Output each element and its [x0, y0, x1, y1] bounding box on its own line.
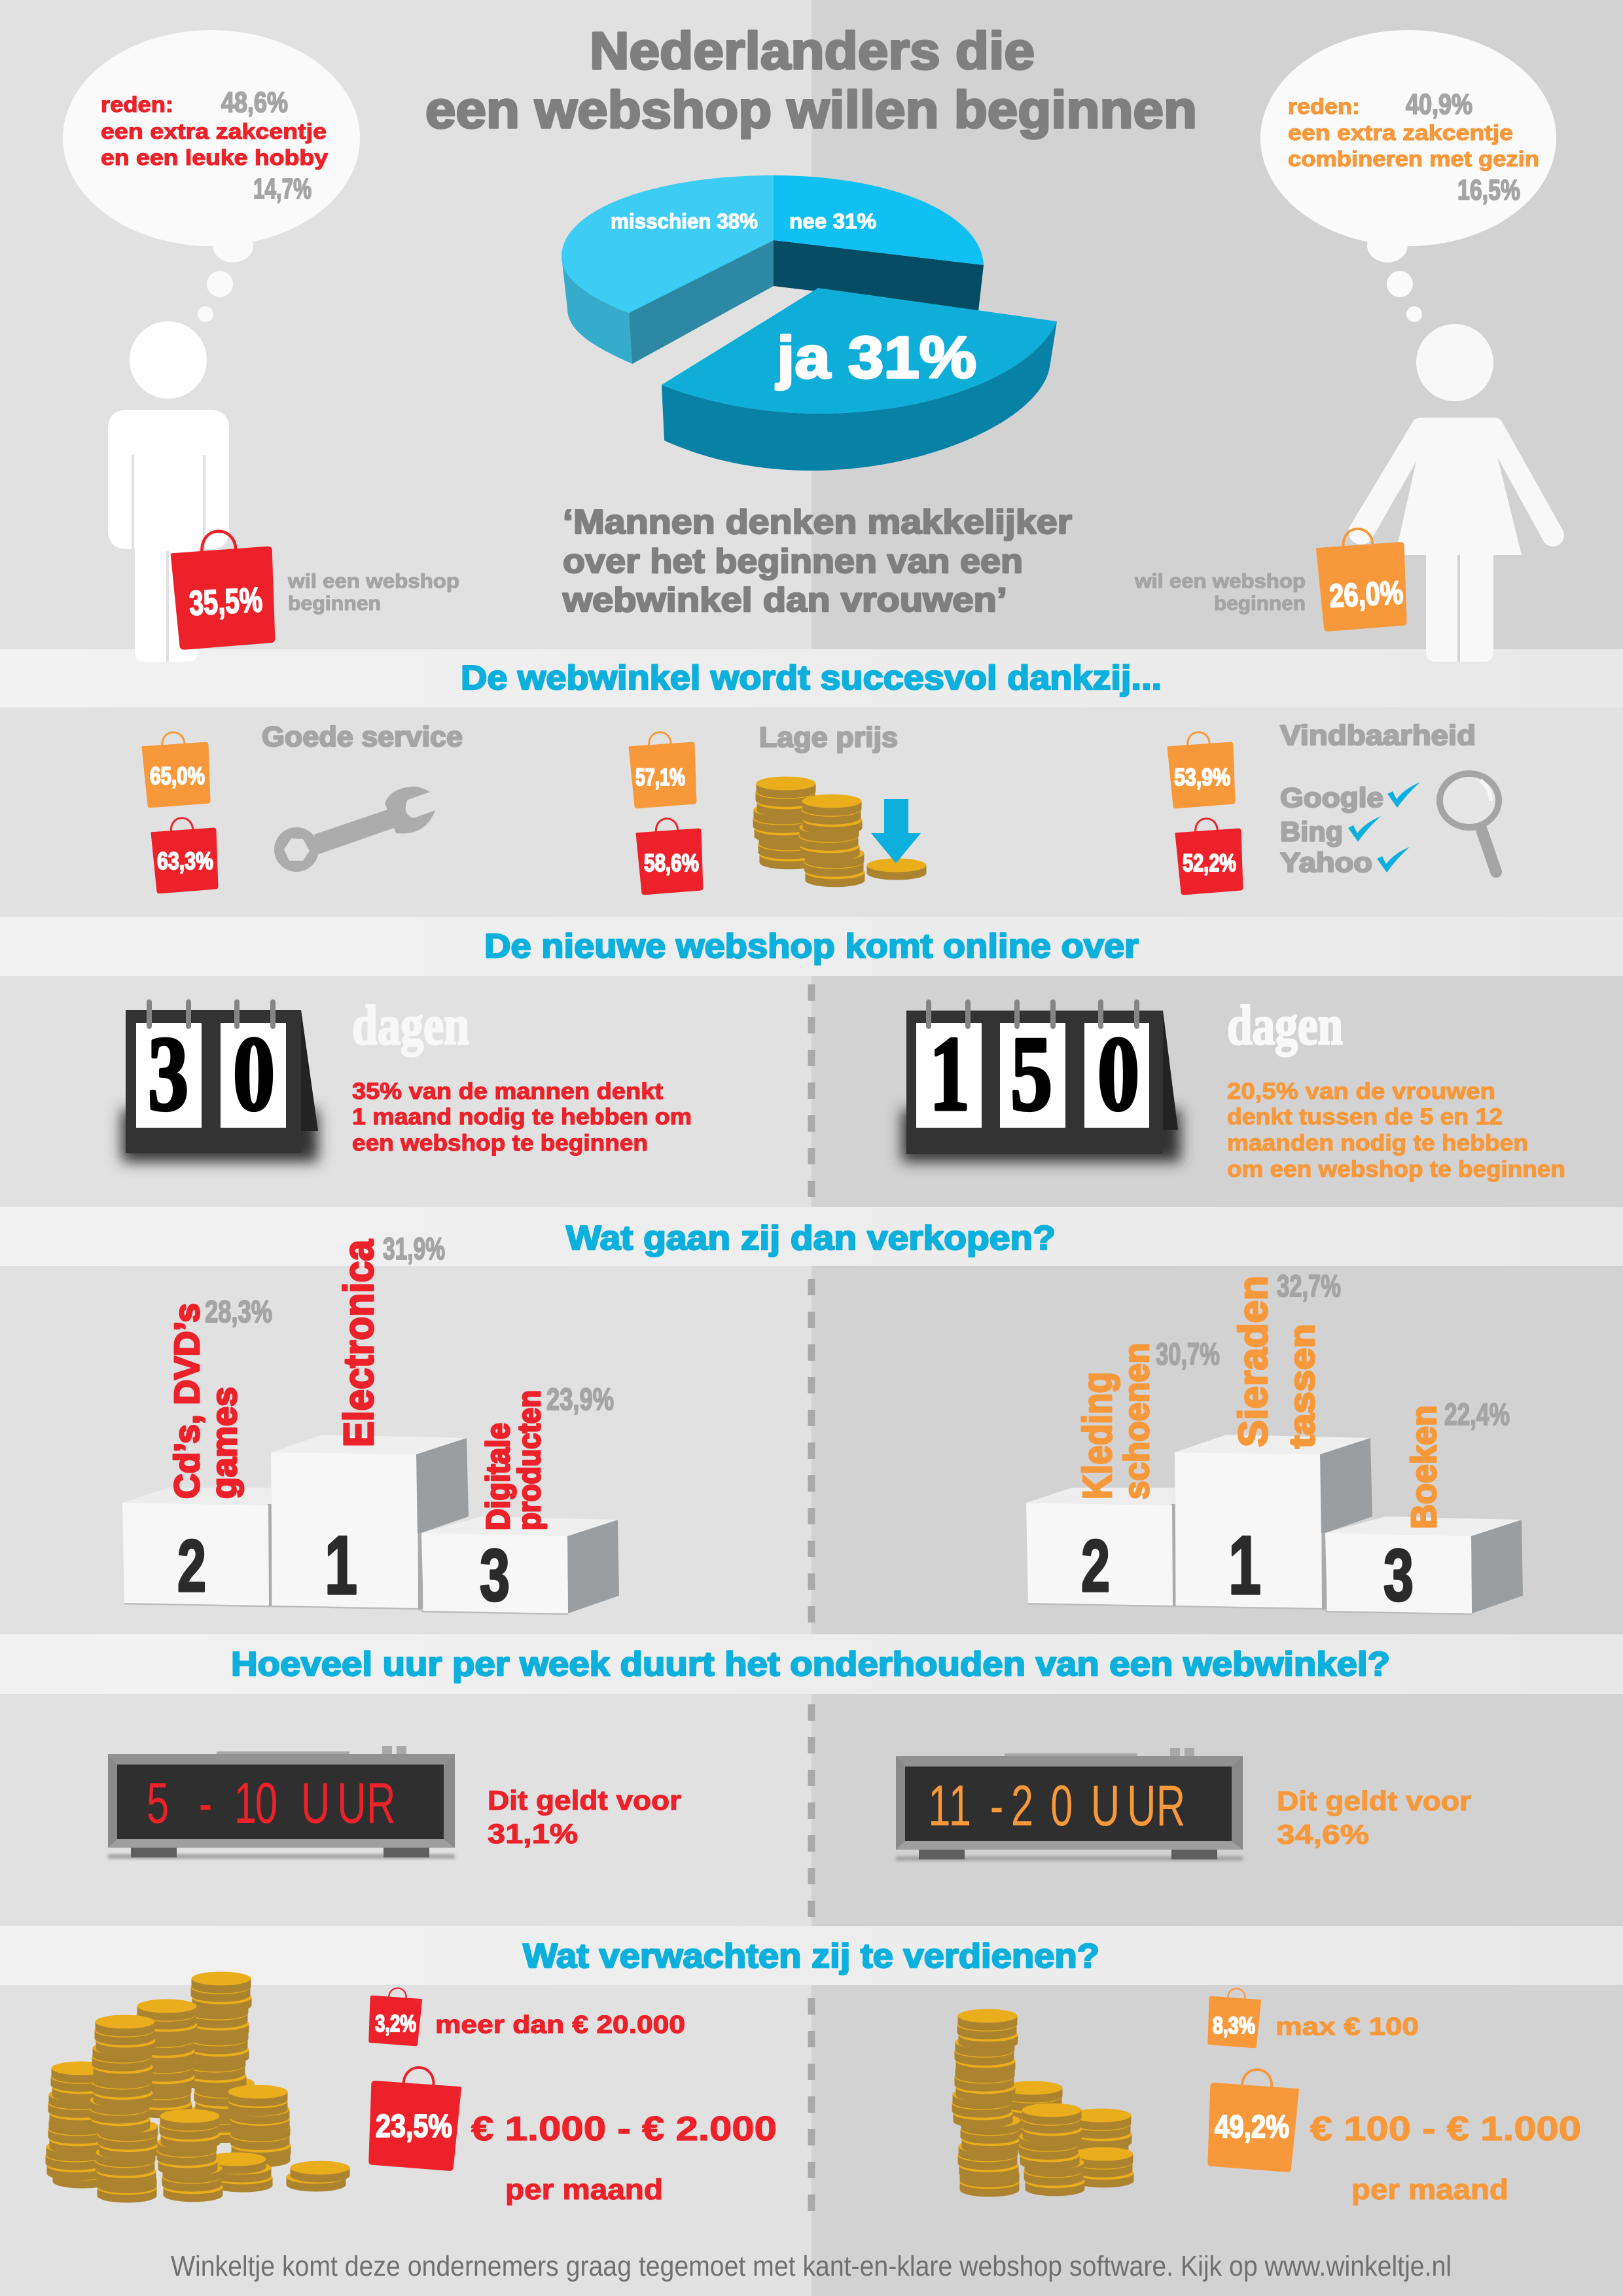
- thought bubble: women: combineren met gezin: [1288, 147, 1539, 171]
- text: vrouwen dagen: denkt tussen de 5 en 12: [1227, 1104, 1503, 1130]
- text: vrouwen dagen: 20,5% van de vrouwen: [1227, 1079, 1495, 1104]
- bag: 63,3%: [152, 818, 217, 893]
- pie chart: [562, 175, 1057, 471]
- thought bubble: women: [1260, 30, 1556, 322]
- bag: 3,2%: 3,2%: [375, 2010, 416, 2037]
- quote: over het beginnen van een: [563, 543, 1023, 581]
- heading: goede service: Goede service: [262, 721, 463, 753]
- icon: magnifier: [1440, 774, 1499, 872]
- icon: man figure: [108, 321, 229, 662]
- label: Boeken: 22,4%: [1444, 1397, 1510, 1431]
- bag: men 35,5%: 35,5%: [188, 581, 263, 623]
- bag: 58,6%: [637, 819, 702, 894]
- bag: 57,1%: 57,1%: [635, 764, 685, 791]
- text: men want webshop: beginnen: [288, 592, 381, 615]
- pie label: misschien: misschien 38%: [611, 209, 758, 233]
- icon: woman figure: [1349, 324, 1564, 662]
- bag: 58,6%: 58,6%: [644, 850, 699, 876]
- bag: 53,9%: [1168, 732, 1234, 808]
- label: Digitale: Digitale: [480, 1423, 516, 1530]
- divider: section 3: [808, 984, 815, 1198]
- bag: 52,2%: 52,2%: [1183, 850, 1236, 876]
- text: mannen dagen: een webshop te beginnen: [352, 1130, 648, 1156]
- panel: lage prijs: [630, 722, 927, 894]
- thought bubble: men: 14,7%: [253, 173, 312, 205]
- footer text: Winkeltje komt deze ondernemers graag tegemoet met kant-en-klare webshop software. Kijk op www.winkeltje.nl: [171, 2250, 1452, 2282]
- bag: 23,5%: [370, 2068, 460, 2170]
- label: Boeken: Boeken: [1404, 1405, 1444, 1529]
- bag: 53,9%: 53,9%: [1174, 764, 1230, 791]
- text: 100 - 1.000: per maand: [1351, 2174, 1508, 2206]
- label: Sieraden: Sieraden: [1231, 1276, 1276, 1447]
- label: producten: producten: [512, 1390, 547, 1530]
- bag: men 35,5%: [172, 531, 274, 648]
- bag: 52,2%: [1176, 819, 1242, 894]
- clock: men: [108, 1746, 455, 1859]
- label: Boeken: [1404, 1397, 1510, 1529]
- icon: coin stacks: [753, 776, 927, 887]
- podium: women: [1026, 1268, 1523, 1616]
- text: 100 - 1.000: € 100 - € 1.000: [1310, 2110, 1581, 2148]
- label: Electronica: [335, 1231, 445, 1447]
- label: schoenen: 30,7%: [1156, 1336, 1220, 1371]
- calendar: 30 days: 3: [148, 1015, 188, 1133]
- text: 1.000 - 2.000: [471, 2110, 777, 2206]
- text: women hours: 34,6%: [1277, 1819, 1369, 1850]
- heading: succes: De webwinkel wordt succesvol dankzij...: [461, 659, 1162, 697]
- text: women hours: Dit geldt voor: [1277, 1785, 1471, 1816]
- text: men hours: Dit geldt voor: [488, 1785, 681, 1816]
- text: men hours: 31,1%: [488, 1818, 578, 1849]
- calendar: 150 days: 0: [1097, 1015, 1139, 1133]
- text: women want webshop: [1134, 569, 1306, 615]
- text: vrouwen dagen: maanden nodig te hebben: [1227, 1130, 1528, 1156]
- heading: lage prijs: Lage prijs: [759, 722, 898, 753]
- divider: section 4: [808, 1279, 815, 1623]
- thought bubble: men: 48,6%: [221, 86, 288, 118]
- text: men want webshop: [287, 569, 459, 615]
- bag: 57,1%: [630, 732, 696, 808]
- thought bubble: men: [63, 30, 360, 322]
- text: 100 - 1.000: [1310, 2110, 1581, 2206]
- label: Cd's, DVD's: [168, 1294, 272, 1499]
- thought bubble: women: 16,5%: [1457, 174, 1520, 206]
- text: women want webshop: beginnen: [1214, 592, 1306, 615]
- label: games: games: [205, 1387, 244, 1499]
- bag: 63,3%: 63,3%: [157, 848, 213, 874]
- icon: wrench: [274, 787, 435, 872]
- text: mannen dagen: 1 maand nodig te hebben om: [352, 1104, 692, 1130]
- quote: ‘Mannen denken makkelijker: [563, 503, 1072, 541]
- text: vrouwen dagen: [1227, 994, 1565, 1182]
- bag: women 26,0%: 26,0%: [1329, 574, 1404, 615]
- text: meer dan 20.000: meer dan € 20.000: [435, 2011, 685, 2039]
- label: Sieraden: 32,7%: [1277, 1268, 1341, 1303]
- bag: women 26,0%: [1317, 529, 1406, 630]
- label: producten: 23,9%: [546, 1382, 614, 1416]
- text: women hours: [1277, 1785, 1471, 1850]
- thought bubble: men: een extra zakcentje: [101, 119, 327, 143]
- divider: section 5: [808, 1704, 815, 1918]
- heading: vindbaarheid: Vindbaarheid: [1280, 720, 1476, 751]
- clock: women: 11 -20 UUR: [928, 1774, 1185, 1839]
- podium: men: [122, 1231, 619, 1616]
- bag: 8,3%: [1208, 1988, 1260, 2047]
- icon: down arrow: [871, 799, 921, 863]
- label: Cd's, DVD's: Cd’s, DVD’s: [168, 1303, 207, 1499]
- text: men want webshop: wil een webshop: [287, 569, 459, 592]
- thought bubble: women: een extra zakcentje: [1288, 120, 1513, 145]
- heading: verkopen: Wat gaan zij dan verkopen?: [566, 1219, 1056, 1257]
- label: Kleding: Kleding: [1075, 1372, 1120, 1499]
- text: mannen dagen: 35% van de mannen denkt: [352, 1079, 663, 1104]
- label: Electronica: Electronica: [335, 1240, 382, 1447]
- text: vrouwen dagen: dagen: [1227, 994, 1343, 1056]
- bag: 49,2%: 49,2%: [1215, 2109, 1289, 2145]
- calendar: 30 days: [122, 999, 318, 1162]
- quote: webwinkel dan vrouwen’: [562, 581, 1007, 619]
- heading: online: De nieuwe webshop komt online over: [484, 927, 1139, 965]
- label: Sieraden: [1231, 1268, 1341, 1447]
- search engines list: Google: [1280, 782, 1383, 813]
- calendar: 30 days: 0: [233, 1015, 275, 1133]
- text: 1.000 - 2.000: € 1.000 - € 2.000: [471, 2110, 777, 2148]
- title: Nederlanders die: [590, 22, 1035, 80]
- icon: coin stacks men: [46, 1971, 349, 2202]
- panel: vindbaarheid: [1168, 720, 1499, 894]
- heading: uren: Hoeveel uur per week duurt het onderhouden van een webwinkel?: [231, 1645, 1390, 1683]
- label: producten: [512, 1382, 614, 1530]
- bag: 65,0%: [143, 732, 209, 807]
- quote: [562, 503, 1072, 619]
- text: women want webshop: wil een webshop: [1134, 569, 1306, 592]
- title: [425, 22, 1197, 139]
- thought bubble: men: reden:: [101, 92, 173, 117]
- thought bubble: men: en een leuke hobby: [101, 145, 329, 170]
- bag: 8,3%: 8,3%: [1213, 2012, 1255, 2039]
- heading: verdienen: Wat verwachten zij te verdienen?: [523, 1937, 1099, 1975]
- thought bubble: women: reden:: [1288, 94, 1360, 118]
- search engines list: [1280, 782, 1420, 878]
- thought bubble: women: 40,9%: [1406, 88, 1472, 120]
- icon: coin stacks women: [952, 2009, 1133, 2197]
- text: vrouwen dagen: om een webshop te beginnen: [1227, 1157, 1565, 1182]
- divider: section 6: [808, 1998, 815, 2211]
- calendar: 150 days: [902, 999, 1181, 1162]
- search engines list: Yahoo: [1280, 847, 1372, 878]
- text: max 100: max € 100: [1275, 2013, 1419, 2041]
- label: Electronica: 31,9%: [383, 1231, 445, 1266]
- panel: goede service: [143, 721, 463, 893]
- bag: 49,2%: [1209, 2070, 1298, 2171]
- bag: 65,0%: 65,0%: [150, 762, 205, 789]
- label: tassen: tassen: [1283, 1324, 1322, 1448]
- bag: 3,2%: [369, 1988, 421, 2045]
- text: mannen dagen: dagen: [352, 994, 469, 1056]
- label: Cd's, DVD's: 28,3%: [205, 1294, 272, 1329]
- pie label: ja: ja 31%: [776, 325, 976, 391]
- pie label: nee: nee 31%: [789, 209, 876, 233]
- title: een webshop willen beginnen: [425, 81, 1197, 139]
- calendar: 150 days: 1: [929, 1015, 970, 1133]
- clock: women: [896, 1748, 1243, 1861]
- search engines list: Bing: [1280, 816, 1343, 847]
- calendar: 150 days: 5: [1010, 1015, 1052, 1133]
- clock: men: 5 - 10 UUR: [147, 1771, 395, 1836]
- text: 1.000 - 2.000: per maand: [505, 2174, 663, 2206]
- label: schoenen: [1117, 1336, 1220, 1499]
- bag: 23,5%: 23,5%: [376, 2109, 452, 2144]
- text: mannen dagen: [352, 994, 692, 1156]
- label: schoenen: schoenen: [1117, 1343, 1156, 1499]
- text: men hours: [488, 1785, 681, 1849]
